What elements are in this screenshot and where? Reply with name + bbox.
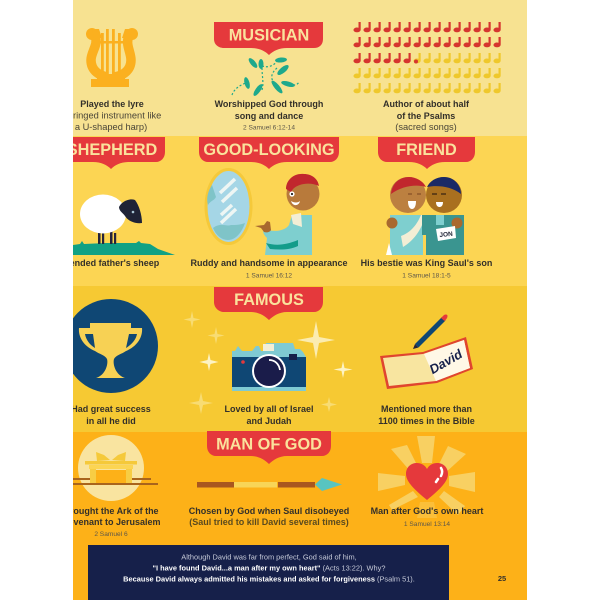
banner: famous <box>214 287 323 320</box>
icon: mirror <box>204 168 252 245</box>
icon: open book: David <box>427 346 466 377</box>
text: spear caption <box>189 506 349 527</box>
text: lyre caption: (stringed instrument like <box>63 110 161 120</box>
banner: musician: MUSICIAN <box>229 26 309 44</box>
panel: book <box>378 314 475 426</box>
text: heart caption: Man after God's own heart <box>371 506 483 516</box>
text: psalms caption: of the Psalms <box>397 111 455 121</box>
text: lyre caption: Played the lyre <box>80 99 144 109</box>
icon: two friends <box>386 177 464 255</box>
text: psalms caption <box>383 99 470 132</box>
icon: spear <box>197 478 342 491</box>
icon: camera <box>232 343 306 391</box>
text: ark caption: Brought the Ark of the <box>63 506 159 516</box>
panel: good-looking <box>190 137 348 280</box>
icon: heart <box>406 463 448 500</box>
icon: pencil <box>413 314 448 349</box>
icon: sheep on hill <box>73 194 175 255</box>
callout: closing quote box: Because David always admitted his mistakes and asked for forgiveness (Psalm 51). <box>123 574 415 584</box>
text: famous caption: Loved by all of Israel <box>224 404 314 414</box>
banner: good-looking <box>199 137 339 169</box>
text: lyre caption <box>74 100 161 132</box>
panel: heart <box>371 436 483 528</box>
text: good-looking caption: 1 Samuel 16:12 <box>246 272 292 280</box>
text: friend caption: 1 Samuel 18:1-5 <box>402 272 451 280</box>
text: shepherd caption: Tended father's sheep <box>65 258 160 268</box>
band: man of god row background <box>73 432 527 600</box>
text: friend caption <box>361 260 492 278</box>
text: musician caption: 2 Samuel 6:12-14 <box>243 124 295 132</box>
icon: ark of the covenant <box>73 435 158 501</box>
text: trophy caption: in all he did <box>86 416 136 426</box>
text: book caption: 1100 times in the Bible <box>378 416 475 426</box>
text: spear caption: (Saul tried to kill David several times) <box>189 517 349 527</box>
text: heart caption: 1 Samuel 13:14 <box>404 521 450 528</box>
text: spear caption: Chosen by God when Saul disobeyed <box>189 506 349 516</box>
text: heart caption <box>371 506 483 528</box>
banner: friend: FRIEND <box>396 141 457 159</box>
banner: shepherd: SHEPHERD <box>67 141 157 159</box>
text: musician caption: Worshipped God through <box>215 99 323 109</box>
chart: pictogram of music notes <box>354 22 501 93</box>
icon: dancing figure <box>232 57 299 97</box>
band: famous row background <box>73 286 527 432</box>
panel: musician <box>214 22 323 132</box>
text: musician caption: song and dance <box>235 111 303 121</box>
text: famous caption: and Judah <box>246 416 292 426</box>
banner: man of god <box>207 431 331 464</box>
text: musician caption <box>214 100 323 130</box>
text: book caption: Mentioned more than <box>381 404 472 414</box>
banner: friend <box>378 137 475 169</box>
icon: sunburst rays <box>378 436 475 518</box>
panel: lyre <box>74 28 161 132</box>
page number: 25 <box>498 574 506 583</box>
callout: closing quote box <box>88 545 449 600</box>
text: ark caption: Covenant to Jerusalem <box>61 517 161 527</box>
icon: lyre <box>86 28 138 87</box>
text: friend caption: His bestie was King Saul's son <box>361 258 492 268</box>
text: psalms caption: (sacred songs) <box>395 122 457 132</box>
text: trophy caption: Had great success <box>71 404 151 414</box>
band: good-looking row background <box>73 136 527 286</box>
panel: shepherd <box>73 137 175 268</box>
icons: sparkles <box>184 311 352 414</box>
text: psalms caption: Author of about half <box>383 99 470 109</box>
text: good-looking caption <box>191 260 348 278</box>
banner: man of god: MAN OF GOD <box>216 436 322 454</box>
text: ark caption: 2 Samuel 6 <box>94 531 128 538</box>
text: trophy caption <box>73 406 150 424</box>
icon: man <box>255 174 320 255</box>
callout: closing quote box: "I have found David...a man after my own heart" (Acts 13:22). Why? <box>153 564 385 572</box>
panel: trophy <box>73 299 158 424</box>
panel: psalms <box>354 22 501 132</box>
banner: famous: FAMOUS <box>234 291 304 309</box>
text: famous caption <box>225 406 313 424</box>
banner: good-looking: GOOD-LOOKING <box>203 141 335 159</box>
callout: closing quote box: Although David was far from perfect, God said of him, <box>181 552 357 562</box>
panel: famous <box>184 287 352 426</box>
text: book caption <box>378 406 474 424</box>
text: ark caption <box>61 506 161 538</box>
panel: man of god <box>189 431 349 527</box>
panel: friend <box>361 137 492 280</box>
panel: ark <box>61 435 161 538</box>
text: good-looking caption: Ruddy and handsome in appearance <box>190 258 348 268</box>
text: lyre caption: a U-shaped harp) <box>75 122 147 132</box>
badge: JON: JON <box>439 231 453 239</box>
icon: trophy in circle <box>64 299 158 393</box>
band: musician row background <box>73 0 527 136</box>
